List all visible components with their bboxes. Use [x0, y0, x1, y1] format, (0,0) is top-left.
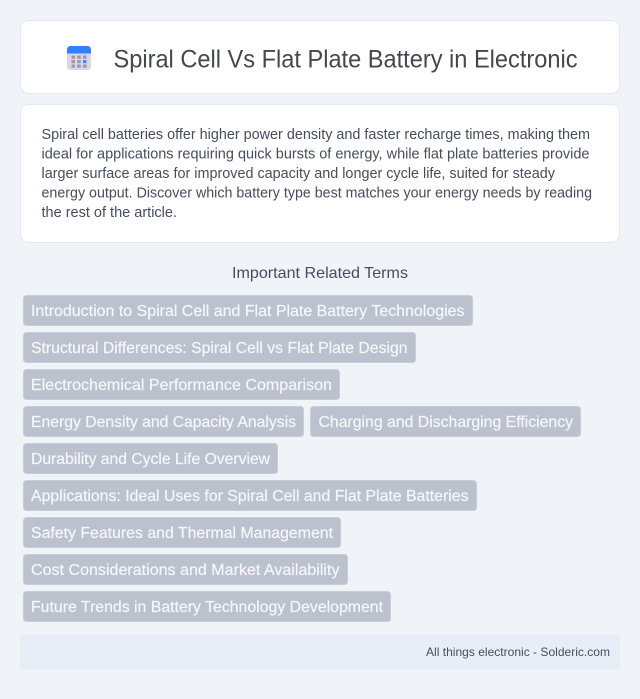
icon: calendar grid: [67, 46, 91, 70]
tag: future trends: Future Trends in Battery Technology Development: [31, 599, 384, 616]
tag: electrochemical performance: Electrochemical Performance Comparison: [31, 377, 332, 394]
text block: description: larger surface areas for improved capacity and longer cycle life, suited for steady: [42, 166, 556, 182]
panel: related terms tags: [24, 296, 580, 622]
tag: charging efficiency: Charging and Discharging Efficiency: [318, 414, 573, 431]
text block: description: the rest of the article.: [42, 205, 177, 221]
text block: description: energy output. Discover which battery type best matches your energy needs by reading: [42, 186, 592, 202]
tag: introduction: Introduction to Spiral Cell and Flat Plate Battery Technologies: [31, 303, 464, 320]
text block: description: Spiral cell batteries offer higher power density and faster recharge times, making them: [42, 127, 590, 143]
tag: safety: Safety Features and Thermal Management: [31, 525, 334, 542]
tag: electrochemical performance: [24, 370, 340, 400]
panel: description card: [20, 104, 620, 242]
tag: durability: Durability and Cycle Life Overview: [31, 451, 270, 468]
tag: structural differences: Structural Differences: Spiral Cell vs Flat Plate Design: [31, 340, 408, 357]
tag: introduction: [24, 296, 472, 326]
panel: footer: [20, 635, 620, 669]
tag: energy density: Energy Density and Capacity Analysis: [31, 414, 296, 431]
footer credit: All things electronic - Solderic.com: [426, 645, 610, 659]
heading: related terms: Important Related Terms: [232, 265, 408, 282]
text block: description: [42, 127, 592, 221]
tag: structural differences: [24, 332, 416, 362]
text block: description: ideal for applications requiring quick bursts of energy, while flat plate batteries provide: [42, 146, 590, 162]
tag: safety: [24, 518, 340, 548]
tag: durability: [24, 444, 278, 474]
tag: cost: [24, 554, 348, 584]
panel: title card: [20, 20, 620, 94]
tag: applications: Applications: Ideal Uses for Spiral Cell and Flat Plate Batteries: [31, 488, 468, 505]
title: Spiral Cell Vs Flat Plate Battery in Electronic: [114, 46, 578, 74]
tag: charging efficiency: [310, 406, 580, 436]
tag: energy density: [24, 406, 304, 436]
tag: applications: [24, 480, 476, 510]
tag: future trends: [24, 592, 390, 622]
tag: cost: Cost Considerations and Market Availability: [31, 562, 340, 579]
